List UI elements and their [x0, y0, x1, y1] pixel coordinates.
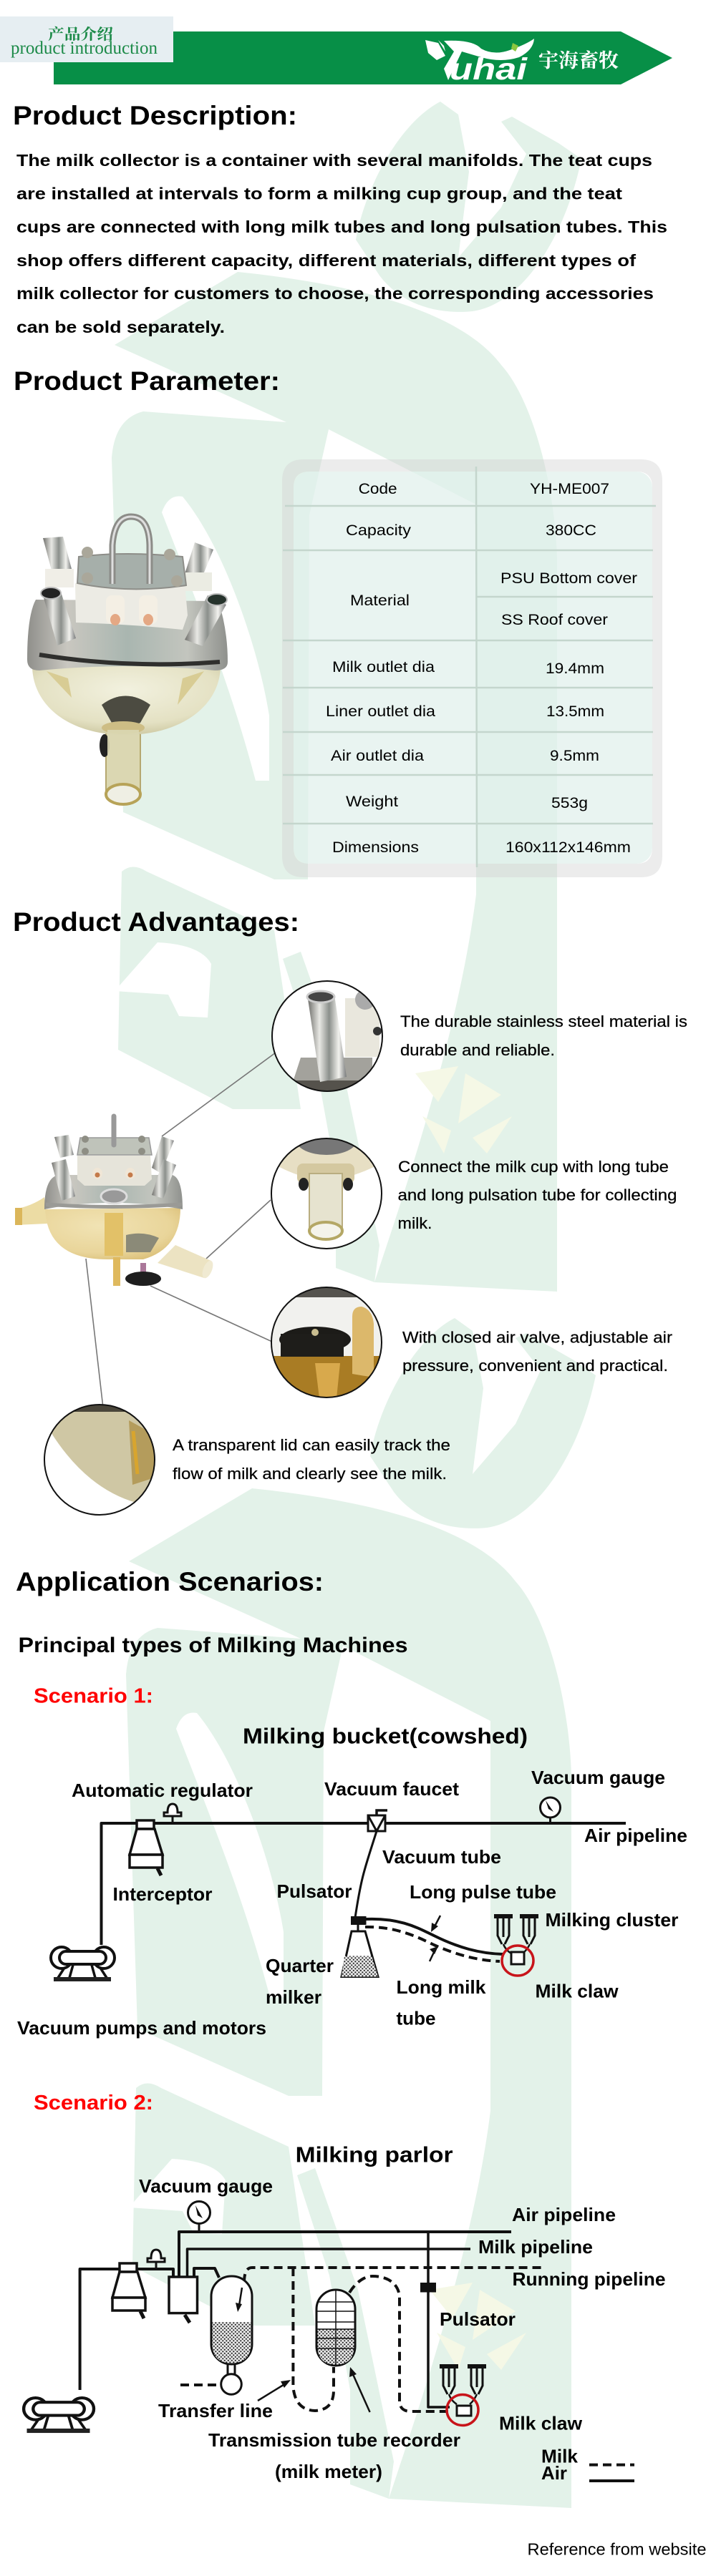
- table values: YH-ME007: [530, 481, 609, 497]
- advantage text 2: and long pulsation tube for collecting: [398, 1186, 677, 1204]
- diagram 1: milking bucket: [51, 1797, 626, 1981]
- diagram 2 labels: Pulsator: [440, 2308, 516, 2330]
- detail circle: air valve: [271, 1287, 382, 1399]
- vacuum faucet: [368, 1810, 387, 1831]
- milk meter: [316, 2290, 355, 2366]
- heading: application scenarios: Application Scenarios:: [16, 1567, 324, 1596]
- table values: 13.5mm: [546, 703, 604, 720]
- arrow: [430, 1946, 438, 1961]
- table values: SS Roof cover: [501, 612, 608, 628]
- diagram 1 labels: Vacuum faucet: [324, 1778, 459, 1800]
- vacuum pump: [24, 2398, 94, 2433]
- subheading: Principal types of Milking Machines: [19, 1634, 408, 1657]
- diagram 2 labels: (milk meter): [275, 2461, 382, 2482]
- table labels: Code: [359, 481, 397, 497]
- diagram title: milking parlor: Milking parlor: [296, 2142, 453, 2167]
- milk claw: [447, 2394, 478, 2426]
- description paragraph: [16, 151, 667, 336]
- milk claw: [502, 1946, 533, 1976]
- detail circle: stainless steel tube: [272, 981, 383, 1092]
- advantage text 4: A transparent lid can easily track the: [173, 1436, 450, 1454]
- description paragraph: are installed at intervals to form a milking cup group, and the teat: [16, 185, 622, 203]
- diagram 1 labels: Vacuum tube: [382, 1846, 501, 1868]
- table values: 160x112x146mm: [505, 839, 631, 856]
- table values: PSU Bottom cover: [500, 570, 637, 587]
- table values: 553g: [551, 795, 588, 811]
- diagram 1 labels: tube: [397, 2008, 435, 2029]
- product introduction tab: [0, 16, 173, 62]
- arrow: transfer line: [258, 2380, 291, 2401]
- receiver link: [194, 2268, 219, 2278]
- advantage text 3: pressure, convenient and practical.: [402, 1357, 668, 1375]
- description paragraph: shop offers different capacity, different materials, different types of: [16, 251, 636, 270]
- header banner: [0, 16, 672, 87]
- heading: product advantages: Product Advantages:: [13, 907, 299, 937]
- arrow: recorder: [349, 2367, 370, 2412]
- advantage text 4: [173, 1436, 450, 1483]
- diagram 1 labels: [17, 1767, 687, 2039]
- pulsation line: [428, 2232, 450, 2407]
- table values: 380CC: [546, 522, 596, 539]
- advantage text 1: [400, 1013, 687, 1059]
- milking cluster: [494, 1914, 538, 1953]
- diagram 1 labels: Long milk: [397, 1976, 486, 1998]
- description paragraph: The milk collector is a container with several manifolds. The teat cups: [16, 151, 652, 170]
- table labels: Material: [350, 592, 410, 609]
- table values: [500, 481, 637, 856]
- air pipeline: [179, 2232, 511, 2276]
- table labels: Liner outlet dia: [326, 703, 435, 720]
- green arrow banner: [54, 31, 672, 84]
- diagram 1 labels: Automatic regulator: [72, 1780, 253, 1801]
- diagram 2 labels: Air pipeline: [512, 2204, 616, 2225]
- long milk tube: [365, 1927, 500, 1961]
- diagram 2 labels: Milk pipeline: [478, 2236, 593, 2258]
- diagram 1 labels: Pulsator: [276, 1880, 352, 1902]
- description paragraph: cups are connected with long milk tubes and long pulsation tubes. This: [16, 218, 667, 236]
- diagram 2: milking parlor: [24, 2201, 546, 2433]
- heading: product parameter: Product Parameter:: [14, 366, 280, 396]
- diagram 1 labels: Air pipeline: [584, 1825, 687, 1846]
- pulsator: [420, 2283, 436, 2293]
- vacuum gauge: [188, 2201, 211, 2232]
- table labels: Weight: [346, 794, 398, 810]
- advantage text 2: milk.: [398, 1214, 432, 1232]
- advantage text 1: durable and reliable.: [400, 1041, 555, 1059]
- scenario 1 label: Scenario 1:: [34, 1684, 153, 1707]
- meter loop: [349, 2276, 450, 2411]
- table labels: Milk outlet dia: [332, 659, 435, 675]
- heading: product description: Product Description:: [13, 101, 297, 130]
- advantage text 3: [402, 1328, 672, 1375]
- parameter table: [282, 459, 662, 877]
- pulsator: [351, 1916, 367, 1925]
- diagram 2 labels: Transmission tube recorder: [208, 2429, 460, 2451]
- dashed outlet: [180, 2384, 221, 2386]
- product introduction tab: 产品介绍: [48, 23, 113, 44]
- diagram 1 labels: Vacuum pumps and motors: [17, 2017, 266, 2039]
- Yuhai logo: [425, 39, 619, 87]
- diagram 2 labels: Transfer line: [158, 2400, 273, 2421]
- scenario 2 label: Scenario 2:: [34, 2092, 153, 2114]
- advantage text 2: [398, 1158, 677, 1232]
- diagram 1 labels: milker: [266, 1986, 321, 2008]
- transfer line: [293, 2268, 334, 2411]
- receiver box: [169, 2277, 198, 2323]
- diagram 1 labels: Milking cluster: [546, 1909, 679, 1931]
- diagram 1 labels: Interceptor: [113, 1883, 212, 1905]
- advantage text 2: Connect the milk cup with long tube: [398, 1158, 669, 1176]
- source note: Reference from website: [527, 2540, 706, 2559]
- legend: Milk: [541, 2446, 579, 2467]
- diagram 1 labels: Long pulse tube: [410, 1881, 556, 1903]
- legend: Air: [541, 2462, 567, 2484]
- advantage text 3: With closed air valve, adjustable air: [402, 1328, 672, 1347]
- detail circle: outlet tube: [271, 1126, 382, 1249]
- table values: 19.4mm: [546, 660, 604, 677]
- quarter milker: [342, 1925, 378, 1976]
- detail circle: transparent lid: [44, 1405, 155, 1516]
- description paragraph: milk collector for customers to choose, the corresponding accessories: [16, 284, 654, 303]
- diagram 2 labels: [139, 2175, 666, 2482]
- diagram 1 labels: Milk claw: [536, 1981, 619, 2002]
- milking cluster: [440, 2364, 486, 2404]
- Yuhai logo: 宇海畜牧: [538, 45, 619, 73]
- running pipeline: [244, 2268, 546, 2283]
- product photo: amber milk collector: [15, 1116, 215, 1286]
- advantage text 1: The durable stainless steel material is: [400, 1013, 687, 1030]
- regulator: [147, 2250, 165, 2269]
- interceptor: [112, 2263, 145, 2318]
- vacuum line: [80, 2269, 173, 2390]
- vacuum gauge: [540, 1797, 560, 1823]
- vacuum pump: [51, 1947, 115, 1981]
- vacuum tube: [355, 1831, 377, 1918]
- table labels: Dimensions: [332, 839, 419, 856]
- automatic regulator: [164, 1804, 181, 1823]
- leader lines: [86, 1053, 276, 1405]
- diagram 2 labels: Milk claw: [499, 2413, 583, 2434]
- diagram 1 labels: Quarter: [266, 1955, 334, 1976]
- table labels: [326, 481, 435, 856]
- Yuhai logo: uhai: [450, 52, 528, 87]
- advantage text 4: flow of milk and clearly see the milk.: [173, 1465, 447, 1483]
- interceptor: [130, 1820, 163, 1875]
- arrow: [431, 1916, 440, 1932]
- long pulse tube: [366, 1919, 503, 1954]
- collection vessel: [211, 2276, 252, 2394]
- product photo: chrome milk collector: [27, 517, 228, 804]
- diagram 2 labels: Vacuum gauge: [139, 2175, 273, 2197]
- product introduction tab: product introduction: [11, 39, 158, 58]
- diagram 2 labels: Running pipeline: [513, 2268, 666, 2290]
- air pipeline: [102, 1823, 626, 1945]
- diagram title: milking bucket: Milking bucket(cowshed): [243, 1724, 528, 1749]
- description paragraph: can be sold separately.: [16, 318, 225, 336]
- milk pipeline: [188, 2249, 470, 2276]
- table labels: Air outlet dia: [331, 748, 424, 764]
- legend: [541, 2446, 634, 2484]
- table values: 9.5mm: [550, 748, 599, 764]
- diagram 1 labels: Vacuum gauge: [531, 1767, 665, 1788]
- table labels: Capacity: [346, 522, 412, 539]
